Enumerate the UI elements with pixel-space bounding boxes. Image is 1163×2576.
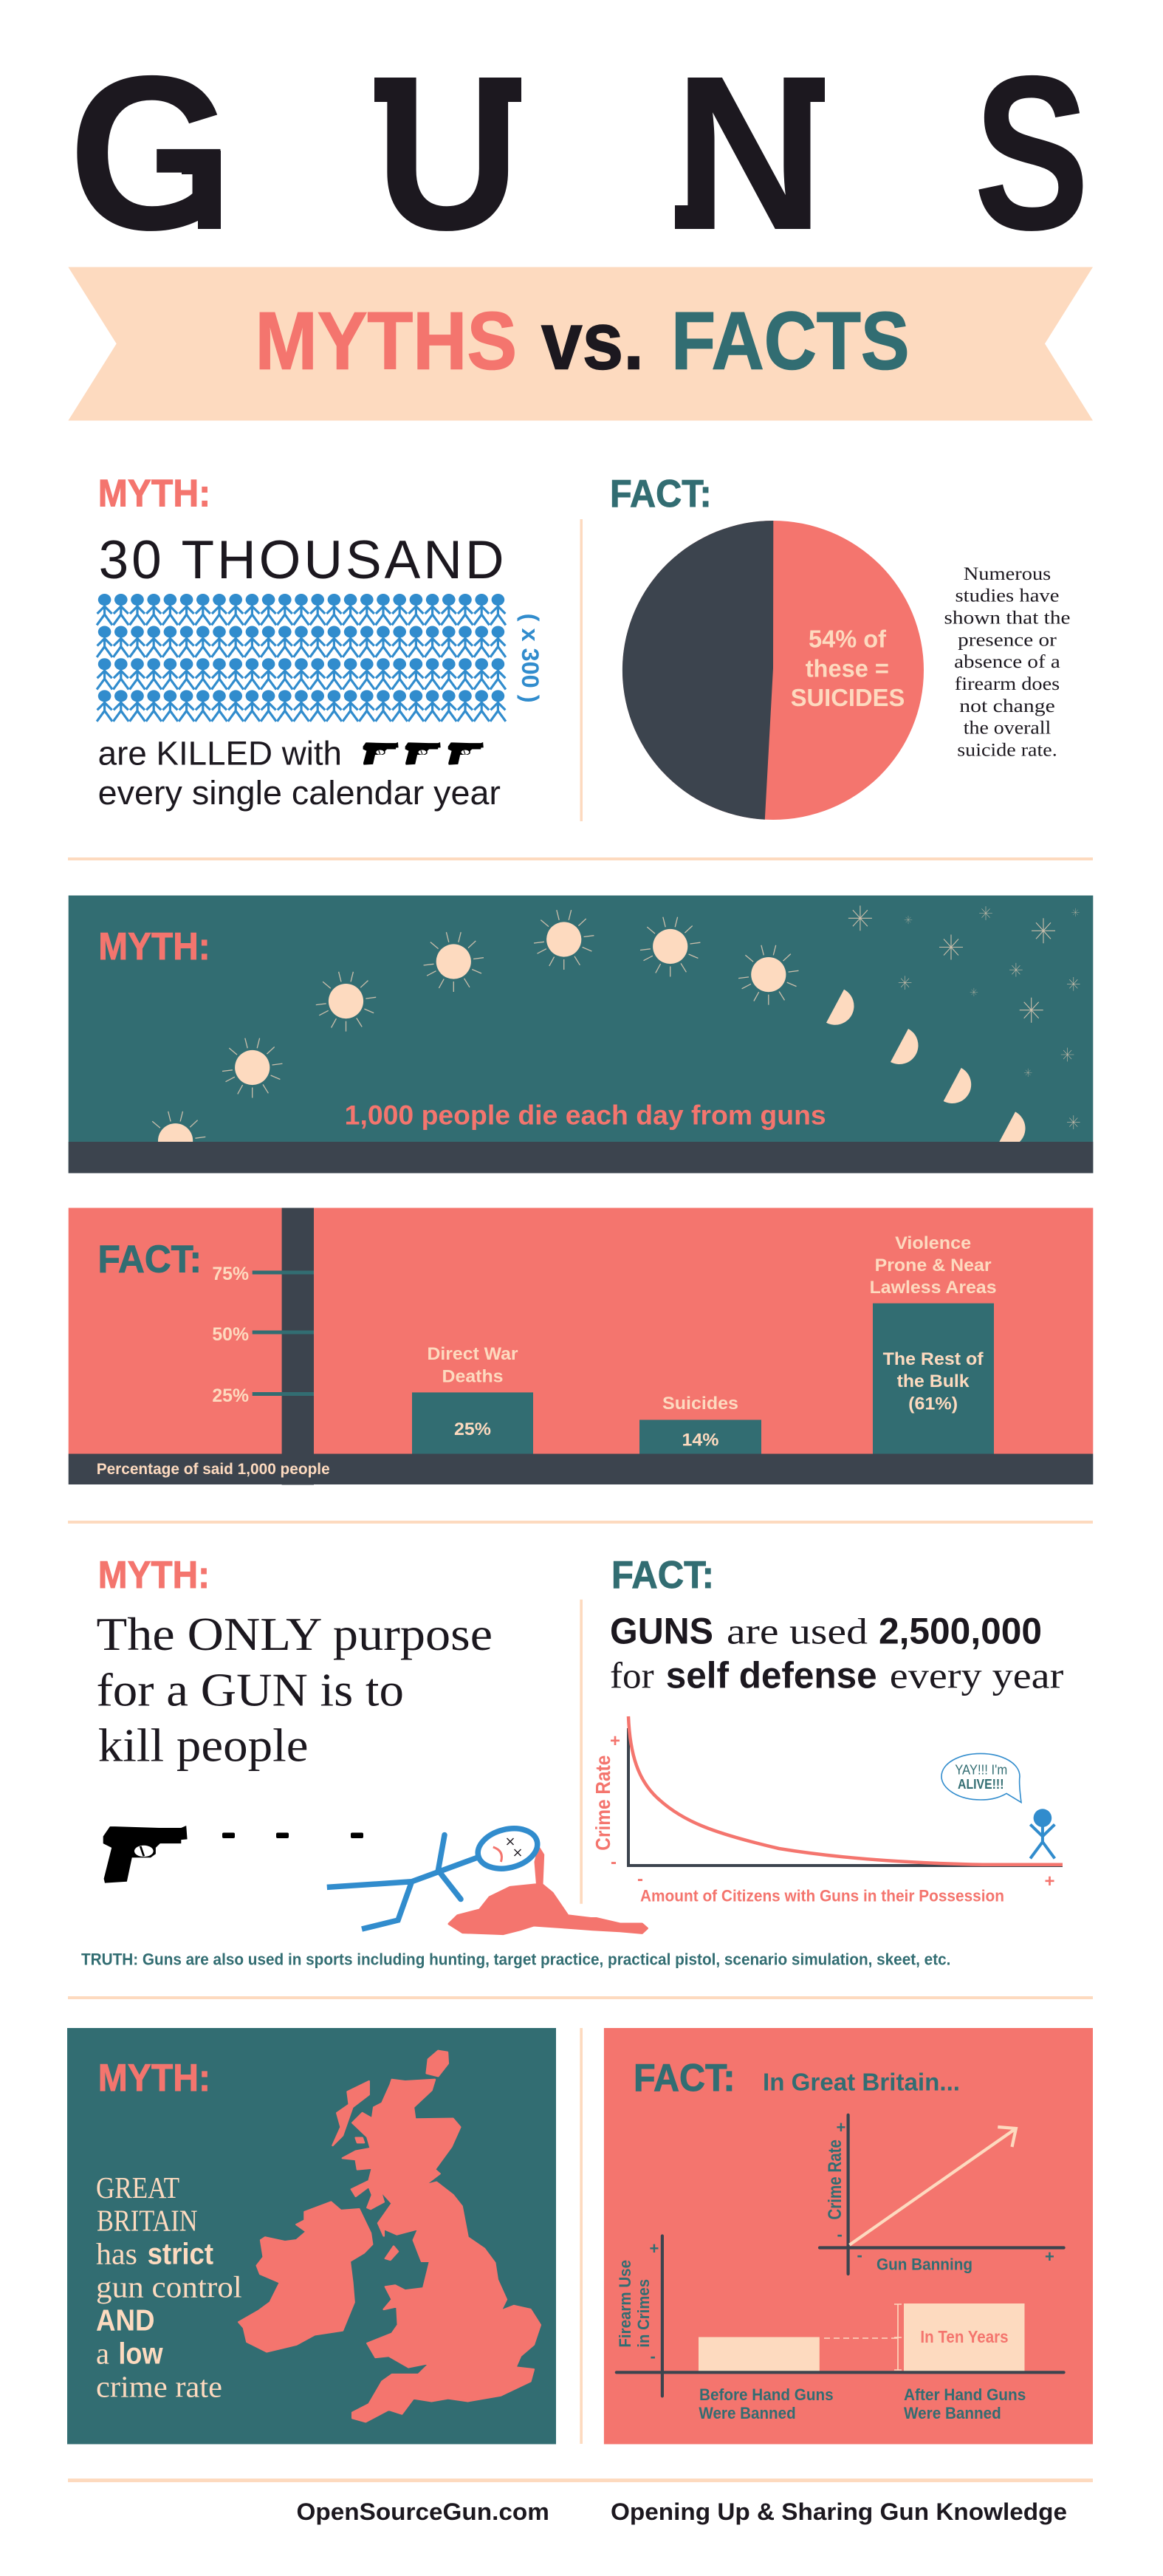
- text: 1,000 people die each day: 1,000 people die each day from guns: [345, 1100, 826, 1130]
- heading: fact: FACT:: [610, 473, 712, 515]
- suns: [145, 910, 798, 1171]
- stars: [848, 905, 1080, 1129]
- line chart: crime rate vs armed citizens: -: [611, 1852, 617, 1872]
- bar chart: firearm use in crimes: Before Hand Guns: [699, 2385, 834, 2404]
- banner: myths vs. facts: vs.: [541, 295, 644, 386]
- bar: suicides: [639, 1394, 761, 1453]
- heading: fact: FACT:: [611, 1554, 714, 1597]
- footer: [297, 2498, 1067, 2525]
- text: numerous studies: shown that the: [944, 609, 1071, 628]
- text: are killed with: are KILLED with: [98, 734, 342, 773]
- text: guns are used 2,500,000: GUNS: [610, 1610, 713, 1651]
- bar chart: firearm use in crimes: Were Banned: [904, 2404, 1001, 2422]
- bar: direct war deaths: 25%: [454, 1419, 491, 1439]
- bar chart: firearm use in crimes: After Hand Guns: [904, 2385, 1026, 2404]
- y axis bar: [282, 1208, 314, 1484]
- bar: rest of the bulk: Violence: [895, 1233, 971, 1253]
- heading: myth: MYTH:: [98, 473, 210, 515]
- bar: rest of the bulk: Prone & Near: [875, 1256, 992, 1275]
- banner: myths vs. facts: FACTS: [671, 295, 910, 386]
- speech bubble: [941, 1753, 1021, 1803]
- text: numerous studies: Numerous: [964, 564, 1051, 584]
- line chart: crime rate vs gun banning: -: [837, 2225, 843, 2244]
- text: for self defense every year: [610, 1655, 1064, 1696]
- bar chart: firearm use in crimes: Were Banned: [699, 2404, 796, 2422]
- text: numerous studies: presence or: [958, 630, 1057, 650]
- text: guns are used 2,500,000: [610, 1610, 1042, 1651]
- line chart: crime rate vs gun banning: +: [1045, 2247, 1054, 2266]
- text: guns are used 2,500,000: are used: [727, 1610, 868, 1651]
- banner: myths vs. facts: MYTHS: [255, 295, 517, 386]
- bar chart: firearm use in crimes: In Ten Years: [920, 2327, 1009, 2346]
- pie chart: these =: [806, 655, 889, 682]
- bar: rest of the bulk: Lawless Areas: [870, 1278, 997, 1298]
- bar: direct war deaths: [412, 1344, 533, 1453]
- text: numerous studies: firearm does: [955, 674, 1060, 694]
- text: numerous studies: studies have: [956, 586, 1059, 606]
- footer: OpenSourceGun.com: [297, 2498, 549, 2525]
- text: every single calendar year: every single calendar year: [98, 774, 501, 812]
- pie chart: 54% of: [809, 626, 887, 653]
- line chart: crime rate vs gun banning: Gun Banning: [876, 2255, 972, 2273]
- panel: myth only purpose: [96, 1554, 647, 1934]
- text: strict gun control: gun control: [96, 2270, 242, 2304]
- text: for self defense every year: every year: [890, 1655, 1064, 1696]
- icon grid: people: [97, 594, 506, 722]
- title: GUNS: N: [673, 30, 825, 276]
- line chart: crime rate vs armed citizens: [591, 1716, 1063, 1905]
- line chart: crime rate vs armed citizens: +: [1044, 1871, 1055, 1891]
- axis labels: 25%: [212, 1385, 249, 1406]
- axis labels: [212, 1264, 249, 1406]
- blood pool: [449, 1848, 647, 1934]
- subheading: in great britain: In Great Britain...: [763, 2068, 960, 2095]
- title: GUNS: U: [375, 31, 521, 276]
- map: british isles: [239, 2051, 541, 2422]
- line chart: crime rate vs armed citizens: Amount of Citizens with Guns in their Possession: [640, 1886, 1004, 1905]
- panel: myth 30 thousand: [97, 473, 543, 812]
- bar chart: firearm use in crimes: +: [650, 2239, 659, 2258]
- line chart: crime rate vs gun banning: [820, 2115, 1064, 2274]
- title: GUNS: S: [973, 30, 1090, 275]
- title: GUNS: [69, 30, 1090, 276]
- title: GUNS: G: [69, 30, 233, 276]
- text: strict gun control: [96, 2171, 242, 2404]
- text: numerous studies: not change: [959, 696, 1055, 716]
- text: strict gun control: crime rate: [96, 2370, 222, 2404]
- bar chart: firearm use in crimes: in Crimes: [634, 2279, 653, 2348]
- ground strip: [69, 1142, 1093, 1173]
- bar: suicides: Suicides: [662, 1394, 738, 1414]
- text: for self defense every year: self defense: [666, 1655, 877, 1696]
- speech bubble: YAY!!! I'm: [955, 1762, 1007, 1777]
- line chart: crime rate vs armed citizens: Crime Rate: [591, 1755, 614, 1851]
- pie chart: [622, 521, 924, 820]
- label: x 300: ( x 300 ): [517, 614, 543, 703]
- text: numerous studies: suicide rate.: [957, 741, 1057, 761]
- base strip: [69, 1453, 1093, 1484]
- alive stick figure: [1030, 1809, 1054, 1858]
- panel: fact in great britain: [604, 2028, 1093, 2445]
- text: the only purpose: kill people: [98, 1719, 309, 1771]
- bar: direct war deaths: Direct War: [427, 1344, 518, 1364]
- speech bubble: ALIVE!!!: [958, 1777, 1004, 1792]
- heading: myth: MYTH:: [98, 1554, 210, 1597]
- bar chart: firearm use in crimes: Firearm Use: [616, 2260, 634, 2348]
- caption: percentage: Percentage of said 1,000 people: [97, 1461, 330, 1478]
- truth note: TRUTH: Guns are also used in sports including hunting, target practice, practical pistol, scenario simulation, skeet, etc.: [81, 1950, 950, 1969]
- text: strict gun control: a: [96, 2336, 109, 2370]
- heading: fact: FACT:: [634, 2057, 735, 2100]
- text: for self defense every year: for: [610, 1655, 654, 1696]
- bar chart: firearm use in crimes: -: [650, 2347, 656, 2366]
- text: strict gun control: BRITAIN: [97, 2204, 198, 2238]
- bar: direct war deaths: Deaths: [442, 1367, 504, 1387]
- axis labels: 50%: [212, 1324, 249, 1345]
- bar: rest of the bulk: The Rest of: [883, 1349, 984, 1369]
- axis labels: 75%: [212, 1264, 249, 1284]
- heading: myth: MYTH:: [98, 925, 210, 968]
- text: strict gun control: low: [118, 2336, 163, 2370]
- icons: three pistols: [363, 742, 484, 765]
- heading: fact: FACT:: [97, 1238, 202, 1281]
- heading: myth: MYTH:: [98, 2057, 210, 2100]
- axis ticks: [253, 1270, 314, 1396]
- bar: rest of the bulk: [870, 1233, 997, 1453]
- line chart: crime rate vs armed citizens: +: [610, 1731, 620, 1751]
- line chart: crime rate vs armed citizens: -: [637, 1869, 643, 1889]
- bar: rest of the bulk: (61%): [908, 1394, 958, 1414]
- icon: pistol: [103, 1826, 188, 1883]
- text: numerous studies: [944, 564, 1071, 761]
- panel: myth 1,000 people per day: [69, 895, 1093, 1173]
- text: numerous studies: absence of a: [954, 652, 1060, 672]
- text: the only purpose: [96, 1608, 493, 1771]
- text: numerous studies: the overall: [964, 719, 1051, 739]
- panel: fact suicides: [610, 473, 1071, 820]
- banner: myths vs. facts: [68, 267, 1093, 421]
- text: 30 thousand: 30 THOUSAND: [99, 530, 504, 590]
- bar: rest of the bulk: the Bulk: [897, 1371, 970, 1391]
- panel: fact bar chart of deaths: [69, 1208, 1093, 1484]
- line chart: crime rate vs gun banning: Crime Rate: [825, 2140, 845, 2220]
- line chart: crime rate vs gun banning: -: [857, 2246, 862, 2264]
- bar: suicides: 14%: [682, 1430, 719, 1450]
- text: strict gun control: has: [96, 2237, 137, 2271]
- text: the only purpose: The ONLY purpose: [96, 1608, 493, 1660]
- pie chart: SUICIDES: [791, 684, 905, 711]
- line chart: crime rate vs gun banning: +: [836, 2118, 845, 2137]
- bar chart: firearm use in crimes: [616, 2236, 1064, 2422]
- text: strict gun control: GREAT: [96, 2171, 179, 2205]
- text: strict gun control: strict: [148, 2237, 213, 2271]
- footer: Opening Up & Sharing Gun Knowledge: [611, 2498, 1067, 2525]
- half moons: [826, 990, 1025, 1147]
- text: strict gun control: AND: [96, 2303, 155, 2337]
- dead stick figure: [327, 1823, 542, 1929]
- text: guns are used 2,500,000: 2,500,000: [879, 1610, 1042, 1651]
- text: the only purpose: for a GUN is to: [96, 1663, 404, 1716]
- icon: bullets: [222, 1833, 363, 1838]
- panel: myth great britain: [67, 2028, 556, 2445]
- panel: fact self defense: [591, 1554, 1064, 1905]
